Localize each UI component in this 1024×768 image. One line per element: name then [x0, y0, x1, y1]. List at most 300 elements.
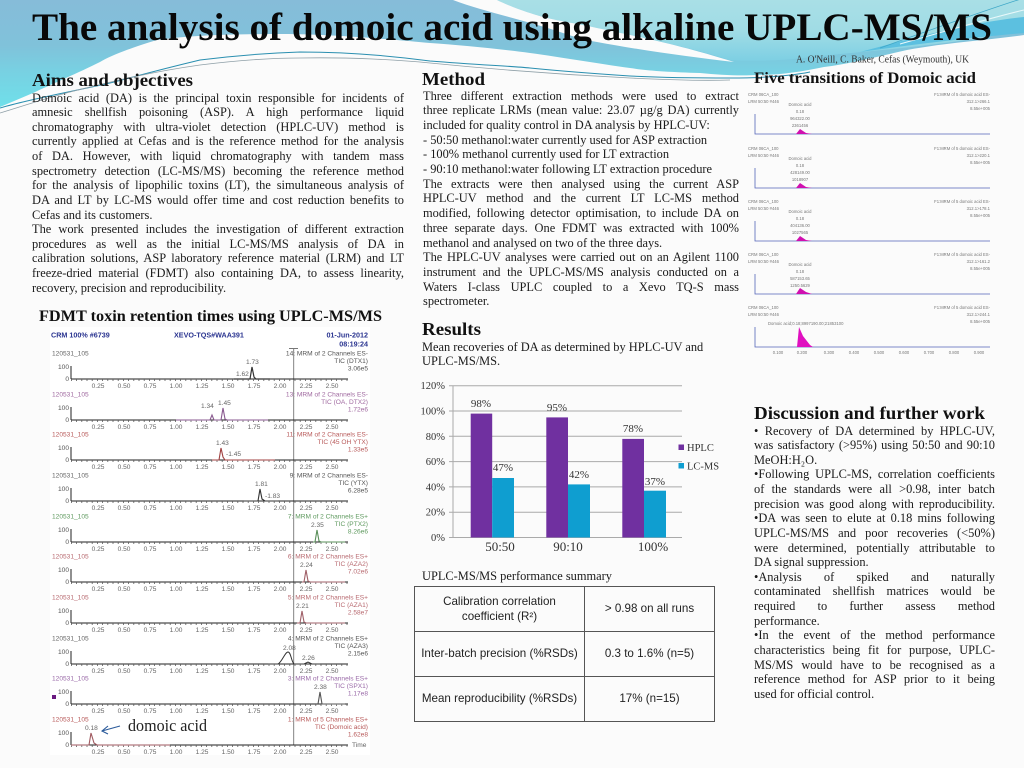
- heading: method: Method: [422, 69, 485, 89]
- heading: aims: Aims and objectives: [32, 70, 193, 90]
- transition 3: 404136.00: [790, 223, 811, 228]
- text: method: spectrometer.: [423, 294, 489, 308]
- y axis labels: [420, 381, 445, 544]
- transition 5: 0.100: [773, 350, 784, 355]
- trace: 45 OH YTX: 1.00: [170, 464, 183, 471]
- text: results intro: [422, 340, 704, 368]
- text: discussion: of the standards were all >0.98, inter batch: [754, 482, 995, 496]
- transition 5: Domoic acid;0.18;8997190.00;21853100: [768, 321, 844, 326]
- transition 3: LRM 50:50 #446: [748, 206, 780, 211]
- text: discussion: precision was good along with reproducibility.: [754, 497, 995, 511]
- trace: DTX1: 2.50: [326, 383, 339, 390]
- trace: AZA2: 2.25: [300, 586, 313, 593]
- text: method: Waters I-class UPLC coupled to a Xevo TQ-S mass: [423, 280, 739, 294]
- trace: YTX: 1.75: [248, 505, 261, 512]
- trace: AZA2: 2.50: [326, 586, 339, 593]
- trace: SPX1: 120531_105: [52, 676, 89, 682]
- chromatogram header: 01-Jun-2012: [326, 330, 368, 340]
- trace: OA DTX2: 0: [65, 417, 69, 424]
- trace: YTX: 2.25: [300, 505, 313, 512]
- table: performance summary: coefficient (R²): [462, 610, 537, 623]
- text: method: The HPLC-UV analyses were carried out on an Agilent 1100: [423, 250, 739, 264]
- trace: AZA1: 5: MRM of 2 Channels ES+: [288, 594, 368, 602]
- bar value labels: 98%: [471, 398, 491, 410]
- trace: YTX: 1.00: [170, 505, 183, 512]
- text: aims and objectives: freeze-dried material (FDMT) also containing DA, to assess linearity,: [32, 266, 404, 280]
- transition 5: [748, 305, 991, 355]
- trace: DTX1: 2.25: [300, 383, 313, 390]
- trace: 45 OH YTX: 0.75: [144, 464, 157, 471]
- trace: AZA2: 7.02e6: [348, 568, 368, 576]
- text: discussion: reference method for ASP prior to it being: [754, 672, 995, 686]
- trace: 45 OH YTX: 120531_105: [52, 432, 89, 438]
- trace: SPX1: TIC (SPX1): [334, 683, 368, 690]
- text: method: Three different extraction methods were used to extract: [423, 88, 739, 102]
- table: performance summary: Mean reproducibility (%RSDs): [422, 692, 577, 705]
- bar value labels: 42%: [569, 469, 589, 481]
- trace: SPX1: 2.00: [274, 708, 287, 715]
- trace: domoic acid: Time: [352, 742, 367, 749]
- text: method: instrument and the UPLC-MS/MS analysis conducted on a: [423, 265, 739, 279]
- trace: AZA1: 2.50: [326, 627, 339, 634]
- retention marker line: [289, 348, 298, 745]
- trace: 45 OH YTX: 0: [65, 457, 69, 464]
- trace: PTX2: [52, 514, 368, 553]
- trace: AZA1: TIC (AZA1): [335, 602, 368, 609]
- trace: SPX1: 1.50: [222, 708, 235, 715]
- text: discussion: contaminated shellfish matrices would be: [754, 584, 995, 598]
- trace: AZA1: 1.00: [170, 627, 183, 634]
- transition 4: 8.55e+005: [970, 266, 991, 271]
- trace: AZA3: 2.25: [300, 668, 313, 675]
- trace: PTX2: 0.75: [144, 546, 157, 553]
- text: aims and objectives: of DA. However, with liquid chromatography with tandem mass: [32, 149, 404, 163]
- trace: DTX1: 14: MRM of 2 Channels ES-: [286, 350, 368, 358]
- text: aims and objectives: procedures as well as the initial LC-MS/MS analysis of DA in: [32, 237, 404, 251]
- transition 1: 312.1>266.1: [967, 99, 991, 104]
- trace: domoic acid: [52, 716, 368, 756]
- y axis labels: 40%: [426, 482, 445, 494]
- trace: OA DTX2: 0.75: [144, 424, 157, 431]
- text: method: methanol and analysed on two of the three days.: [423, 236, 662, 250]
- trace: PTX2: 100: [58, 527, 69, 534]
- authors: A. O'Neill, C. Baker, Cefas (Weymouth), UK: [796, 54, 970, 66]
- text: aims and objectives: Cefas and its customers.: [32, 208, 152, 222]
- trace: DTX1: 100: [58, 364, 69, 371]
- trace: 45 OH YTX: TIC (45 OH YTX): [318, 439, 368, 446]
- trace: AZA3: 2.15e6: [348, 650, 368, 658]
- x axis labels: 100%: [638, 539, 668, 554]
- trace: PTX2: TIC (PTX2): [335, 521, 368, 528]
- trace: AZA1: 1.75: [248, 627, 261, 634]
- trace: AZA1: 0.75: [144, 627, 157, 634]
- trace: DTX1: [52, 350, 368, 390]
- transition 4: 587153.65: [790, 276, 811, 281]
- transition 4: 0.18: [796, 269, 805, 274]
- trace: DTX1: 1.62: [236, 371, 249, 378]
- chromatogram header: XEVO-TQS#WAA391: [174, 330, 244, 340]
- bars: HPLC: [471, 414, 644, 538]
- trace: YTX: 0.50: [118, 505, 131, 512]
- text: results intro: Mean recoveries of DA as determined by HPLC-UV and: [422, 340, 703, 354]
- trace: OA DTX2: 1.00: [170, 424, 183, 431]
- transition 4: F1:MRM of 5 domoic acid ES-: [934, 252, 991, 257]
- trace: DTX1: 1.00: [170, 383, 183, 390]
- legend: [678, 443, 719, 472]
- transition 2: 1018907: [792, 177, 809, 182]
- text: discussion: performance.: [754, 614, 820, 628]
- heading: five transitions: Five transitions of Domoic acid: [754, 70, 976, 87]
- trace: domoic acid: 1.75: [248, 749, 261, 756]
- trace: OA DTX2: 100: [58, 405, 69, 412]
- transition 3: 0.18: [796, 216, 805, 221]
- transition 5: 0.700: [924, 350, 935, 355]
- trace: PTX2: 1.25: [196, 546, 209, 553]
- transition 3: [748, 199, 991, 241]
- trace: AZA2: 1.00: [170, 586, 183, 593]
- text: method: The extracts were then analysed using the current ASP: [423, 177, 739, 191]
- trace: AZA2: TIC (AZA2): [335, 561, 368, 568]
- trace: domoic acid: 1.62e8: [348, 732, 368, 738]
- transition 3: 312.1>178.1: [967, 206, 991, 211]
- transition 2: CRM 06CA_100: [748, 146, 779, 151]
- trace: AZA2: 100: [58, 567, 69, 574]
- text: aims and objectives: DA and LT by LC-MS would offer time and cost reduction benefits to: [32, 193, 404, 207]
- transition 5: 0.300: [824, 350, 835, 355]
- trace: SPX1: 100: [58, 689, 69, 696]
- trace: SPX1: 1.75: [248, 708, 261, 715]
- heading: results: Results: [422, 319, 481, 339]
- trace: AZA2: [52, 554, 368, 593]
- chromatogram header: 08:19:24: [339, 340, 368, 348]
- transition 5: 312.1>244.1: [967, 312, 991, 317]
- trace: PTX2: 2.25: [300, 546, 313, 553]
- text: discussion: UPLC-MS/MS and poor recoveries (<50%): [754, 526, 995, 540]
- trace: AZA3: TIC (AZA3): [335, 643, 368, 650]
- transition 2: F1:MRM of 5 domoic acid ES-: [934, 146, 991, 151]
- transition 2: 8.55e+005: [970, 160, 991, 165]
- text: discussion: required to further assess method: [754, 599, 995, 613]
- trace: SPX1: 1.17e8: [348, 690, 368, 698]
- trace: YTX: [52, 472, 368, 512]
- trace: 45 OH YTX: 2.25: [300, 464, 313, 471]
- trace: OA DTX2: 2.50: [326, 424, 339, 431]
- trace: YTX: 6.28e5: [348, 488, 368, 494]
- trace: OA DTX2: TIC (OA, DTX2): [321, 399, 368, 406]
- trace: AZA3: 0.50: [118, 668, 131, 675]
- trace: AZA3: 1.50: [222, 668, 235, 675]
- trace: DTX1: 120531_105: [52, 350, 89, 358]
- text: method: modified, following detector optimisation, to include DA on: [423, 206, 739, 220]
- transition 3: 1027565: [792, 230, 809, 235]
- trace: AZA3: 4: MRM of 2 Channels ES+: [288, 636, 368, 642]
- trace: AZA2: 1.50: [222, 586, 235, 593]
- trace: OA DTX2: 1.34: [201, 403, 214, 410]
- transition 4: 312.1>161.2: [967, 259, 991, 264]
- trace: SPX1: 3: MRM of 2 Channels ES+: [288, 676, 368, 682]
- trace: DTX1: 0.75: [144, 383, 157, 390]
- trace: domoic acid: 1.50: [222, 749, 235, 756]
- bar value labels: [471, 398, 665, 488]
- trace: AZA1: 0.25: [92, 627, 105, 634]
- trace: AZA3: 2.26: [302, 655, 315, 662]
- trace: AZA1: 120531_105: [52, 594, 89, 602]
- transition 5: 0.800: [949, 350, 960, 355]
- text: aims and objectives: calibration solutions, ASP laboratory reference material (LRM) and LT: [32, 251, 404, 265]
- trace: AZA3: 1.75: [248, 668, 261, 675]
- text: aims and objectives: Domoic acid (DA) is the principal toxin responsible for incidents of: [32, 90, 404, 104]
- text: discussion: MS/MS would have to be recognised as a: [754, 658, 995, 672]
- chart: recovery bars: [420, 381, 719, 554]
- chromatogram header: CRM 100% #6739: [51, 330, 110, 340]
- chart gridlines: [449, 386, 682, 538]
- trace: domoic acid: 0: [65, 742, 69, 749]
- trace: DTX1: 1.75: [248, 383, 261, 390]
- trace: AZA3: 0.25: [92, 668, 105, 675]
- trace: AZA3: 100: [58, 649, 69, 656]
- transition 4: [748, 252, 991, 294]
- trace: AZA1: 2.21: [296, 603, 309, 610]
- trace: 45 OH YTX: 0.50: [118, 464, 131, 471]
- transition 5: 0.500: [874, 350, 885, 355]
- trace: 45 OH YTX: 1.50: [222, 464, 235, 471]
- transition 1: CRM 06CA_100: [748, 92, 779, 97]
- transition 1: 0.18: [796, 109, 805, 114]
- trace: AZA3: 0: [65, 661, 69, 668]
- transition 1: 964322.00: [790, 116, 811, 121]
- transition 5: 8.55e+005: [970, 319, 991, 324]
- table: performance summary: Inter-batch precision (%RSDs): [421, 647, 578, 660]
- text: results intro: UPLC-MS/MS.: [422, 354, 500, 368]
- trace: AZA3: 2.08: [283, 645, 296, 652]
- trace: AZA1: 100: [58, 608, 69, 615]
- trace: domoic acid: 100: [58, 730, 69, 737]
- trace: OA DTX2: 1.45: [218, 400, 231, 407]
- trace: PTX2: 2.35: [311, 522, 324, 529]
- table: performance summary: 17% (n=15): [619, 692, 680, 705]
- trace: SPX1: 1.00: [170, 708, 183, 715]
- trace: YTX: 100: [58, 486, 69, 493]
- transition 5: 0.600: [899, 350, 910, 355]
- trace: YTX: 0.25: [92, 505, 105, 512]
- trace: OA DTX2: 2.25: [300, 424, 313, 431]
- text: method: - 100% methanol currently used for LT extraction: [423, 147, 669, 161]
- table: performance summary: Calibration correlation: [443, 594, 556, 608]
- text: discussion: characteristics being fit for purpose, UPLC-: [754, 643, 995, 657]
- trace: SPX1: [52, 676, 368, 715]
- transition 3: F1:MRM of 5 domoic acid ES-: [934, 199, 991, 204]
- text: method: - 50:50 methanol:water currently used for ASP extraction: [423, 133, 707, 147]
- trace: YTX: -1.83: [265, 493, 280, 500]
- trace: 45 OH YTX: 11: MRM of 2 Channels ES-: [286, 432, 368, 438]
- trace: AZA2: 6: MRM of 2 Channels ES+: [288, 554, 368, 560]
- trace: AZA2: 0.75: [144, 586, 157, 593]
- table: performance summary: [414, 586, 715, 722]
- y axis labels: 60%: [426, 457, 445, 468]
- trace: domoic acid: 2.00: [274, 749, 287, 756]
- trace: AZA3: 2.00: [274, 668, 287, 675]
- trace: AZA1: [52, 594, 368, 634]
- x axis labels: 90:10: [553, 539, 583, 554]
- text: aims and objectives: currently applied at Cefas and is the reference method for the analysis: [32, 134, 404, 148]
- trace: OA DTX2: 1.50: [222, 424, 235, 431]
- transition 5: LRM 50:50 #446: [748, 312, 780, 317]
- trace: domoic acid: 0.18: [85, 725, 98, 732]
- trace: 45 OH YTX: 100: [58, 445, 69, 452]
- trace: domoic acid: 1: MRM of 5 Channels ES+: [288, 716, 368, 724]
- trace: AZA3: [52, 636, 368, 675]
- trace: PTX2: 0.50: [118, 546, 131, 553]
- text: discussion: •DA was seen to elute at 0.18 mins following: [754, 511, 995, 525]
- trace: AZA2: 1.25: [196, 586, 209, 593]
- text: discussion: DA signal suppression.: [754, 555, 869, 569]
- trace: PTX2: 8.26e6: [348, 528, 368, 536]
- trace: OA DTX2: [52, 392, 368, 431]
- heading: retention times: FDMT toxin retention times using UPLC-MS/MS: [39, 308, 382, 325]
- y axis labels: 100%: [420, 406, 445, 418]
- chart: toxin retention chromatograms: [50, 327, 370, 756]
- trace: AZA1: 2.25: [300, 627, 313, 634]
- trace: YTX: 2.00: [274, 505, 287, 512]
- trace: YTX: 120531_105: [52, 472, 89, 480]
- text: method: included for quality control in DA analysis by HPLC-UV:: [423, 118, 710, 132]
- trace: OA DTX2: 0.25: [92, 424, 105, 431]
- trace: YTX: 1.25: [196, 505, 209, 512]
- y axis labels: 20%: [426, 508, 445, 518]
- trace: PTX2: 0: [65, 539, 69, 546]
- trace: AZA3: 1.25: [196, 668, 209, 675]
- trace: AZA1: 1.50: [222, 627, 235, 634]
- text: aims and objectives: chromatography with ultra-violet detection (HPLC-UV) method is: [32, 120, 404, 134]
- transition 4: 1250.5629: [790, 283, 811, 288]
- trace: AZA2: 1.75: [248, 586, 261, 593]
- text: aims and objectives: recovery, precision and reproducibility.: [32, 281, 226, 295]
- bar value labels: 37%: [645, 476, 665, 488]
- trace: AZA2: 0.25: [92, 586, 105, 593]
- text: discussion: •Analysis of spiked and naturally: [754, 570, 995, 584]
- trace: PTX2: 1.75: [248, 546, 261, 553]
- trace: SPX1: 2.25: [300, 708, 313, 715]
- trace: PTX2: 120531_105: [52, 514, 89, 520]
- trace: YTX: 1.50: [222, 505, 235, 512]
- trace: YTX: 0.75: [144, 505, 157, 512]
- chromatogram header: [51, 330, 368, 348]
- trace: DTX1: TIC (DTX1): [334, 358, 368, 365]
- trace: YTX: 0: [65, 498, 69, 505]
- legend: HPLC: [687, 443, 714, 454]
- trace: PTX2: 1.50: [222, 546, 235, 553]
- trace: 45 OH YTX: 1.25: [196, 464, 209, 471]
- transition 2: 428149.00: [790, 170, 811, 175]
- trace: DTX1: 1.50: [222, 383, 235, 390]
- heading: discussion: Discussion and further work: [754, 403, 985, 423]
- trace: domoic acid: 0.25: [92, 749, 105, 756]
- trace: YTX: TIC (YTX): [338, 480, 368, 487]
- trace: SPX1: 0.25: [92, 708, 105, 715]
- text: discussion: were determined, potentially attributable to: [754, 540, 995, 554]
- transition 1: [748, 92, 991, 134]
- trace: SPX1: 0.50: [118, 708, 131, 715]
- transition 2: LRM 50:50 #446: [748, 153, 780, 158]
- trace: DTX1: 0.25: [92, 383, 105, 390]
- trace: 45 OH YTX: -1.45: [226, 451, 241, 458]
- trace: AZA2: 120531_105: [52, 554, 89, 560]
- table: performance summary: > 0.98 on all runs: [605, 602, 694, 615]
- transition 5: 0.900: [974, 350, 985, 355]
- transition 5: CRM 06CA_100: [748, 305, 779, 310]
- text: table caption: UPLC-MS/MS performance summary: [422, 568, 612, 582]
- text: aims and objectives: [32, 90, 404, 295]
- trace: PTX2: 2.00: [274, 546, 287, 553]
- trace: domoic acid: 0.50: [118, 749, 131, 756]
- text: aims and objectives: spectrometry detection (LC-MS/MS) becoming the reference method: [32, 164, 404, 178]
- trace: OA DTX2: 1.72e6: [348, 406, 368, 414]
- trace: YTX: 9: MRM of 2 Channels ES-: [290, 472, 368, 480]
- bars: LC-MS: [492, 478, 666, 538]
- transition 4: CRM 06CA_100: [748, 252, 779, 257]
- trace: DTX1: 2.00: [274, 383, 287, 390]
- text: aims and objectives: for the analysis of lipophilic toxins (LT), the simultaneous analysis of: [32, 178, 404, 192]
- trace: DTX1: 0.50: [118, 383, 131, 390]
- trace: AZA1: 0.50: [118, 627, 131, 634]
- callout: domoic acid: domoic acid: [128, 716, 208, 735]
- trace: AZA1: 2.58e7: [348, 610, 368, 616]
- text: method: three separate days. One FDMT was extracted with 100%: [423, 221, 739, 235]
- text: discussion: •In the event of the method performance: [754, 628, 995, 642]
- chart: five domoic acid transitions: [748, 92, 991, 355]
- trace: 45 OH YTX: [52, 432, 368, 471]
- trace: domoic acid: 120531_105: [52, 716, 89, 724]
- text: discussion: •Following UPLC-MS, correlation coefficients: [754, 467, 995, 481]
- transition 1: 8.55e+005: [970, 106, 991, 111]
- trace: OA DTX2: 1.75: [248, 424, 261, 431]
- transition 2: 312.1>220.1: [967, 153, 991, 158]
- trace: AZA1: 0: [65, 620, 69, 627]
- transition 5: 0.400: [849, 350, 860, 355]
- trace: SPX1: 0: [65, 701, 69, 708]
- trace: YTX: 2.50: [326, 505, 339, 512]
- trace: domoic acid: 1.00: [170, 749, 183, 756]
- trace: AZA2: 0.50: [118, 586, 131, 593]
- y axis labels: 80%: [426, 432, 445, 443]
- trace: 45 OH YTX: 2.00: [274, 464, 287, 471]
- transition 3: 8.55e+005: [970, 213, 991, 218]
- trace: AZA3: 1.00: [170, 668, 183, 675]
- transition 5: 0.200: [797, 350, 808, 355]
- transition 2: [748, 146, 991, 188]
- trace: OA DTX2: 1.25: [196, 424, 209, 431]
- trace: 45 OH YTX: 0.25: [92, 464, 105, 471]
- text: method: HPLC-UV method and the current LT LC-MS method: [423, 191, 739, 205]
- trace: SPX1: 2.38: [314, 684, 327, 691]
- trace: SPX1: 2.50: [326, 708, 339, 715]
- trace: AZA3: 120531_105: [52, 636, 89, 642]
- transition 4: LRM 50:50 #446: [748, 259, 780, 264]
- trace: AZA2: 0: [65, 579, 69, 586]
- text: method: - 90:10 methanol:water following LT extraction procedure: [423, 162, 712, 176]
- text: method: [423, 88, 739, 308]
- trace: 45 OH YTX: 1.75: [248, 464, 261, 471]
- trace: DTX1: 1.73: [246, 359, 259, 366]
- transition 1: LRM 50:50 #446: [748, 99, 780, 104]
- text: discussion: used for official control.: [754, 687, 874, 701]
- trace: AZA2: 2.24: [300, 562, 313, 569]
- trace: 45 OH YTX: 2.50: [326, 464, 339, 471]
- y axis labels: 0%: [431, 533, 445, 544]
- x axis labels: 50:50: [485, 539, 515, 554]
- trace: AZA1: 1.25: [196, 627, 209, 634]
- trace: 45 OH YTX: 1.33e5: [348, 446, 368, 454]
